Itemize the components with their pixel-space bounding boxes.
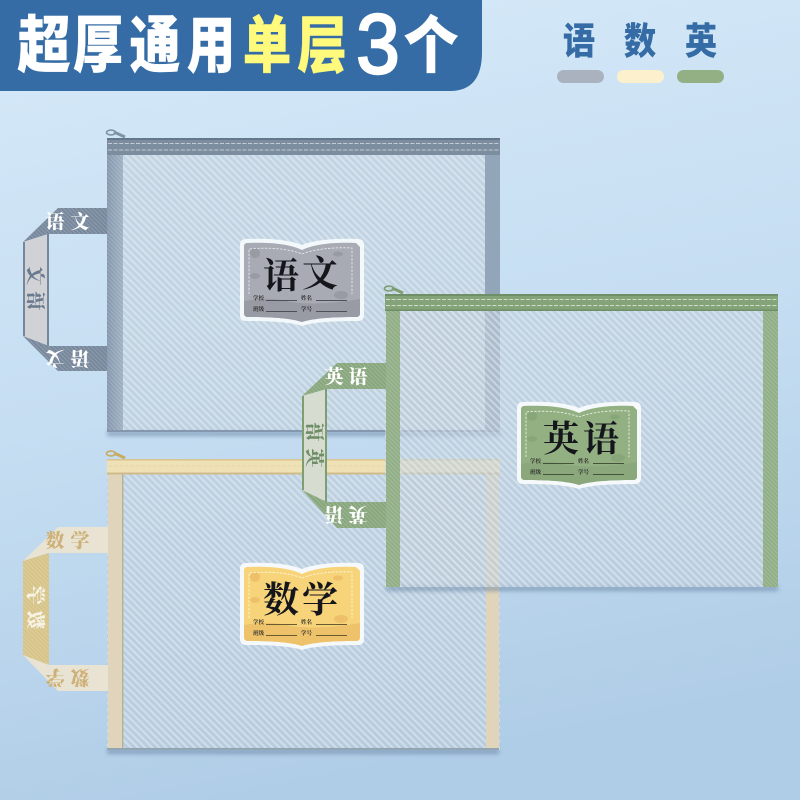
form lines: 学号 <box>301 629 313 637</box>
label: 英语 book sticker <box>517 402 641 489</box>
zipper strip <box>107 138 500 155</box>
handle label side: 语 <box>303 422 325 442</box>
handle: yellow <box>23 527 108 691</box>
handle label side <box>303 422 326 468</box>
form lines <box>253 294 347 313</box>
handle: grey <box>23 208 107 371</box>
form lines: 班级 <box>253 629 265 637</box>
handle label top: 英 <box>324 365 344 388</box>
icon: zipper pull <box>384 286 403 293</box>
title: 层 <box>297 11 347 80</box>
form lines: 学号 <box>301 305 313 313</box>
legend: subject names: 数 <box>624 22 657 62</box>
title: 个 <box>404 12 458 81</box>
label title <box>263 254 338 296</box>
handle label side <box>24 266 46 311</box>
icon: zipper pull <box>106 451 125 458</box>
legend: colour swatches <box>557 70 724 83</box>
form lines <box>530 457 624 476</box>
label title <box>543 419 619 459</box>
handle label side: 文 <box>24 266 46 286</box>
form lines: 学校 <box>253 618 265 626</box>
handle label bottom <box>45 666 90 689</box>
form lines: 姓名 <box>301 618 313 626</box>
zipper strip <box>107 459 500 474</box>
panel: title banner <box>0 0 482 91</box>
form lines: 学校 <box>530 457 542 465</box>
label title: 数 <box>263 580 299 620</box>
form lines: 姓名 <box>301 294 313 302</box>
handle label bottom <box>45 347 90 369</box>
label title: 语 <box>263 256 299 296</box>
legend: subject names <box>563 22 717 62</box>
label title: 文 <box>302 254 338 294</box>
handle label top: 语 <box>45 211 65 233</box>
handle label bottom <box>324 503 368 526</box>
handle label top: 语 <box>348 366 368 388</box>
handle label top <box>45 211 90 233</box>
panel: yellow 数学 mesh bag <box>106 451 500 754</box>
label title: 语 <box>583 419 619 459</box>
title: 3 <box>356 0 400 92</box>
handle label bottom: 语 <box>70 347 90 369</box>
form lines: 学号 <box>578 468 590 476</box>
form lines <box>253 618 347 637</box>
form lines: 班级 <box>530 468 542 476</box>
title: 超 <box>17 12 71 81</box>
title: 用 <box>187 11 235 80</box>
label: 数学 book sticker <box>240 563 364 650</box>
handle label top: 学 <box>70 529 90 552</box>
label title: 英 <box>543 419 579 459</box>
panel: grey 语文 mesh bag <box>106 130 501 436</box>
legend: subject names: 英 <box>685 22 717 62</box>
zipper strip <box>385 294 778 311</box>
handle: green <box>302 363 386 528</box>
handle label top <box>45 529 90 552</box>
handle label top: 数 <box>45 529 65 552</box>
handle label side: 语 <box>24 291 46 311</box>
title: 厚 <box>73 11 123 80</box>
title <box>17 0 458 92</box>
handle label bottom: 数 <box>70 666 90 689</box>
panel: green 英语 mesh bag <box>384 286 778 591</box>
handle label side: 数 <box>24 610 47 630</box>
title: 单 <box>243 11 291 80</box>
label title: 学 <box>302 580 338 620</box>
label: 语文 book sticker <box>240 239 364 326</box>
handle label top <box>324 365 368 388</box>
legend: subject names: 语 <box>563 22 595 62</box>
handle label top: 文 <box>70 211 90 233</box>
icon: zipper pull <box>106 130 125 137</box>
label title <box>263 580 338 620</box>
form lines: 班级 <box>253 305 265 313</box>
handle label bottom: 语 <box>324 503 344 525</box>
form lines: 学校 <box>253 294 265 302</box>
form lines: 姓名 <box>578 457 590 465</box>
title: 通 <box>130 12 180 81</box>
handle label side: 英 <box>303 448 326 468</box>
handle label bottom: 学 <box>45 666 65 689</box>
handle label side: 学 <box>24 585 47 605</box>
handle label side <box>24 585 47 630</box>
handle label bottom: 文 <box>45 347 65 369</box>
handle label bottom: 英 <box>348 503 368 526</box>
